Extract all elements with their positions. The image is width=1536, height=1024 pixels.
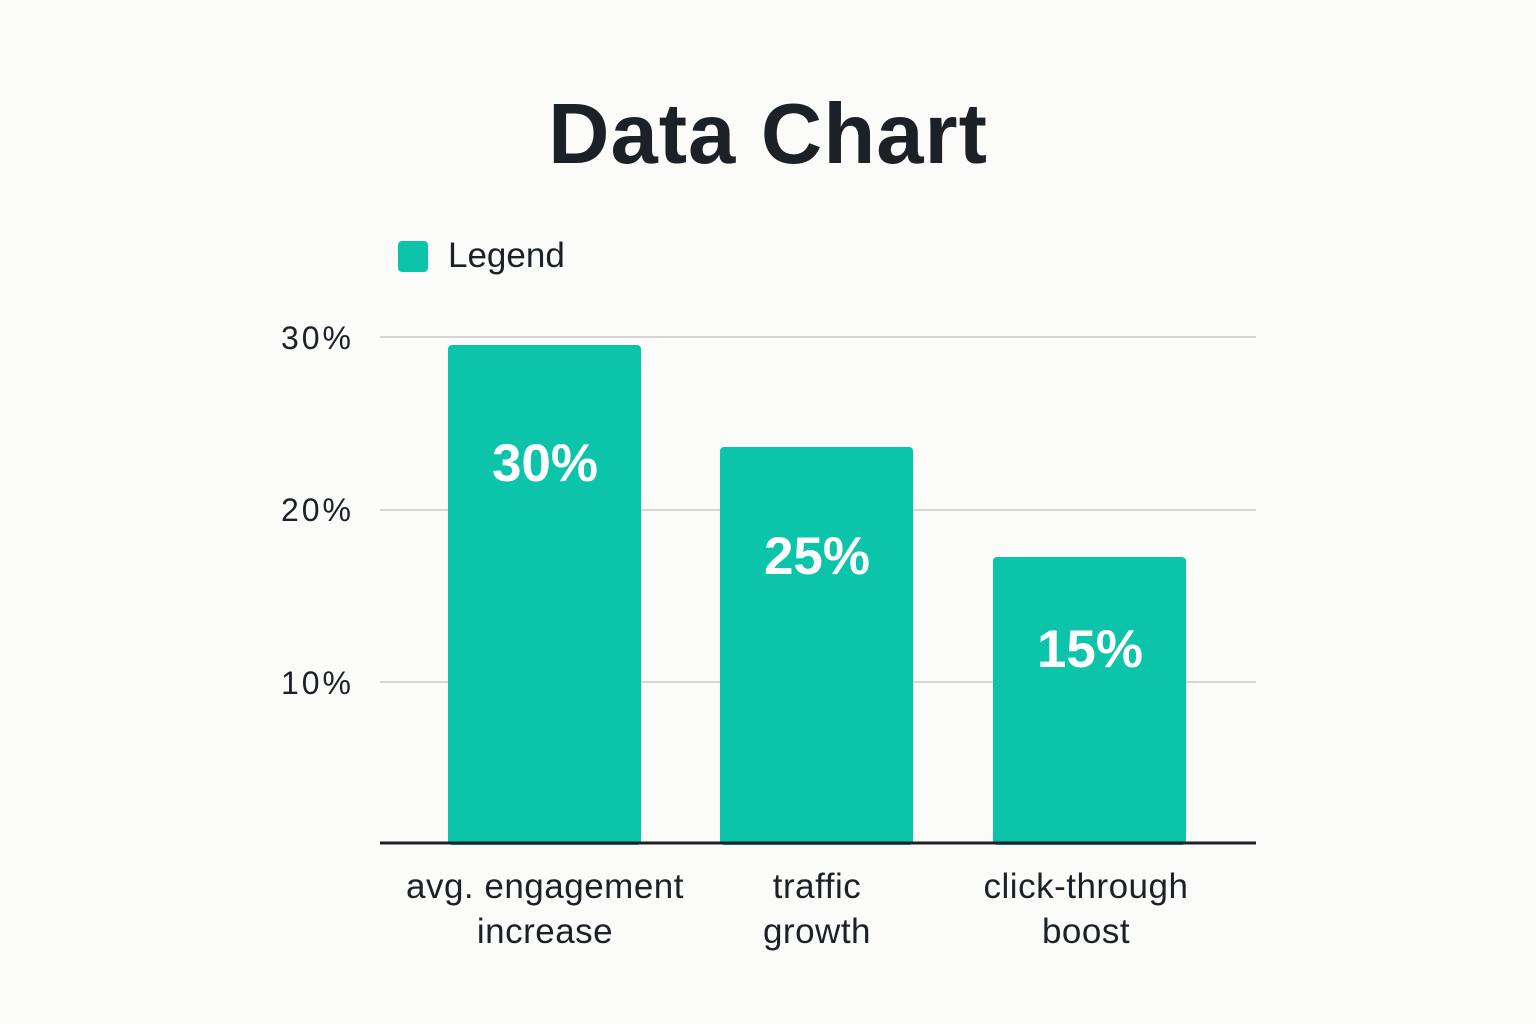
bar chart: 30% (492, 434, 598, 493)
bar chart: click-through (984, 867, 1188, 906)
bar chart: avg. engagement (406, 867, 684, 906)
legend (398, 236, 565, 275)
bar chart: 20% (281, 492, 354, 528)
bar chart: 30% (281, 320, 354, 356)
legend label: Legend (448, 236, 565, 275)
title: Data Chart (548, 87, 988, 182)
legend swatch (398, 241, 428, 272)
bar chart: traffic (773, 867, 861, 906)
bar chart: increase (477, 912, 613, 951)
bar chart: 25% (764, 527, 870, 586)
bar chart: 10% (281, 665, 354, 701)
bar chart: growth (763, 912, 871, 951)
bar chart: boost (1042, 912, 1130, 951)
bar chart: 15% (1037, 620, 1143, 679)
